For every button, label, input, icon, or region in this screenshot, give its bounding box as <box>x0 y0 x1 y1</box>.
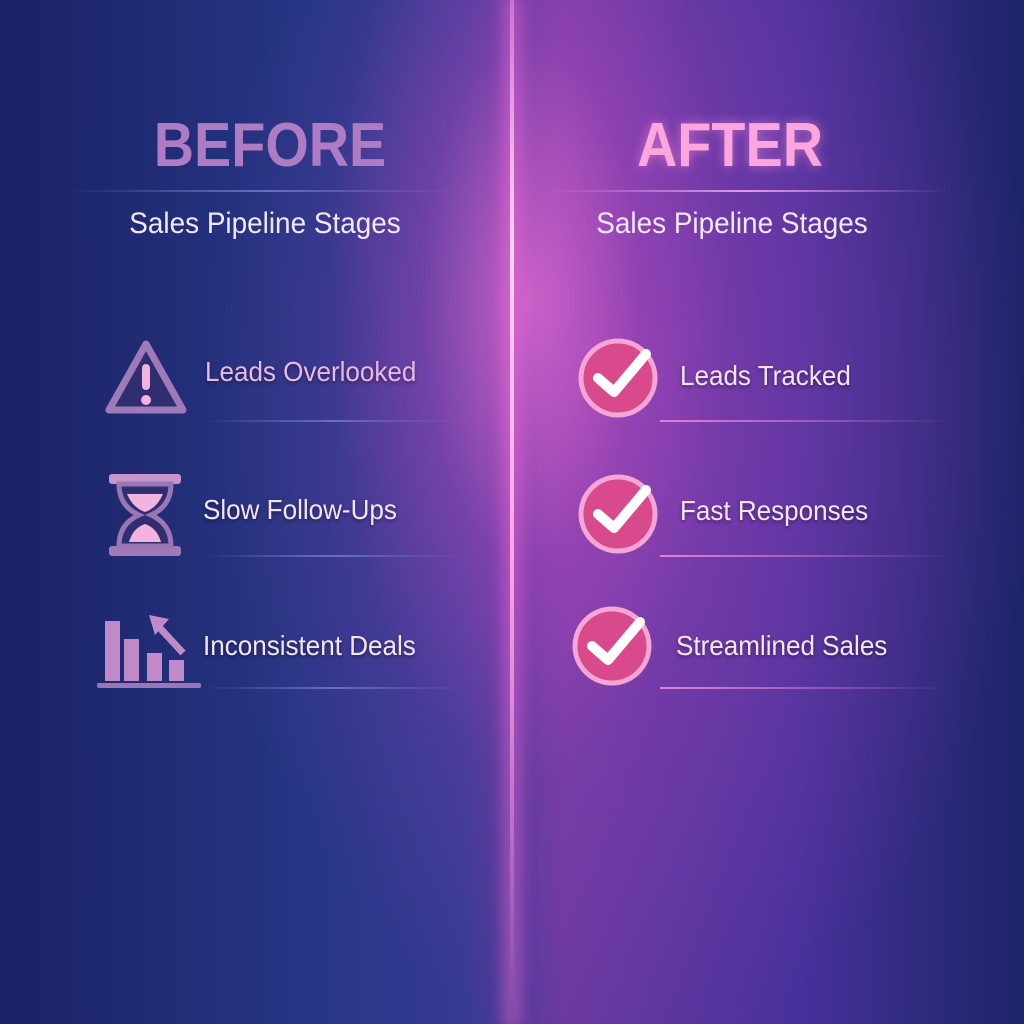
icon: check 1 <box>578 338 658 418</box>
subtitle: after: Sales Pipeline Stages <box>596 207 868 240</box>
icon: check 2 <box>578 474 658 554</box>
text: leads overlooked: Leads Overlooked <box>205 356 416 387</box>
text: fast responses: Fast Responses <box>680 495 868 526</box>
text: slow follow-ups: Slow Follow-Ups <box>203 494 397 525</box>
panel: before items <box>97 340 444 689</box>
center glow line <box>510 0 514 1024</box>
text: streamlined sales: Streamlined Sales <box>676 630 887 661</box>
heading: after: AFTER <box>637 111 823 180</box>
heading: before: BEFORE <box>154 111 386 180</box>
icon: declining bars <box>97 615 201 688</box>
subtitle: before: Sales Pipeline Stages <box>129 207 401 240</box>
text: inconsistent deals: Inconsistent Deals <box>203 630 416 661</box>
icon: check 3 <box>572 606 652 686</box>
text: leads tracked: Leads Tracked <box>680 360 851 391</box>
icon: warning triangle <box>106 340 186 414</box>
panel: after items <box>572 338 936 689</box>
icon: hourglass <box>109 474 181 556</box>
